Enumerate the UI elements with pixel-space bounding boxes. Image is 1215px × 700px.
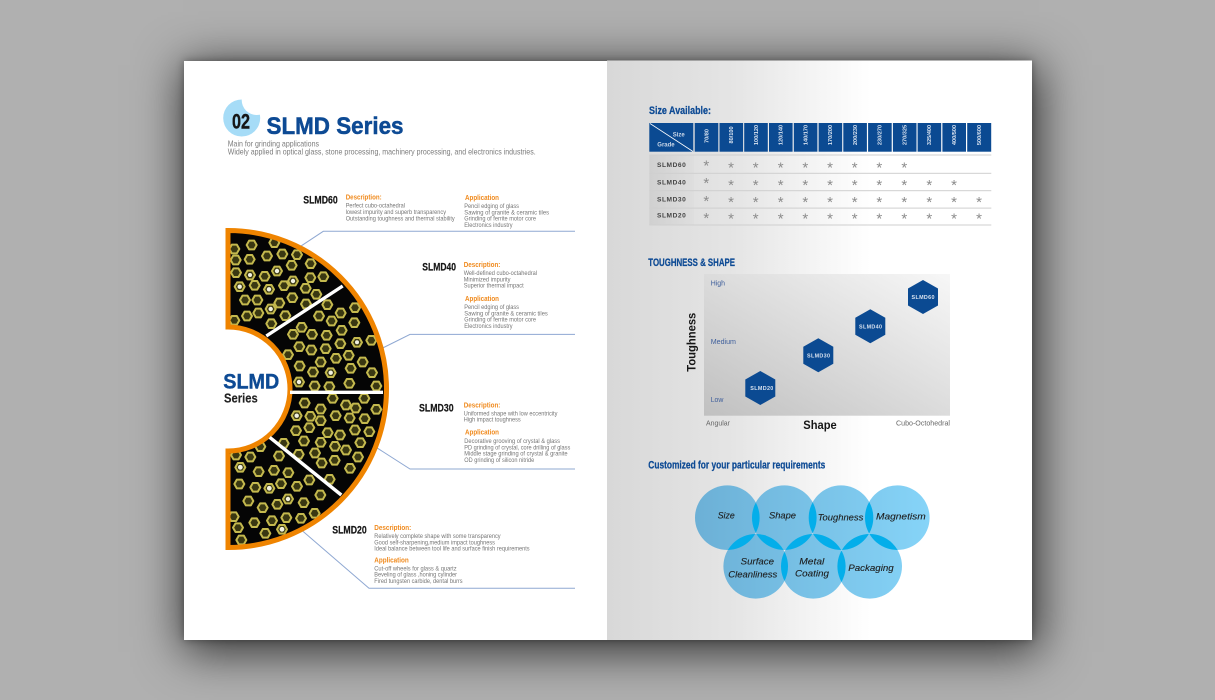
grade block: SLMD20: Description:: [374, 523, 411, 532]
size marks: SLMD20: *: [852, 210, 858, 228]
panel: customization options: [648, 460, 930, 599]
size marks: SLMD30: *: [753, 194, 759, 211]
table corner header: Grade: [657, 143, 675, 149]
grade block: SLMD20: Cut-off wheels for glass & quartz: [374, 565, 457, 572]
heading: size available: Size Available:: [649, 105, 711, 117]
x axis labels: Cubo-Octohedral: [896, 419, 950, 428]
grade block: SLMD40: [422, 260, 548, 330]
hexagon: SLMD20: SLMD20: [750, 386, 773, 392]
table column headers: 120/140: [779, 125, 785, 145]
table row backgrounds: [649, 154, 991, 226]
grade block: SLMD40: Sawing of granite & ceramic tiles: [464, 310, 548, 317]
circle labels: Cleanliness: [728, 569, 778, 580]
intro text: Main for grinding applications: [228, 140, 319, 149]
hexagon: SLMD60: SLMD60: [912, 295, 934, 301]
grade block: SLMD40: SLMD40: [422, 261, 456, 273]
size marks: SLMD20: *: [778, 210, 784, 228]
size marks: SLMD40: *: [802, 177, 808, 194]
diagram: SLMD wheel with four crystal grades: [223, 230, 386, 548]
grade block: SLMD40: Superior thermal impact: [464, 283, 524, 290]
panel: left page series overview: [223, 85, 575, 588]
hexagon: SLMD30: SLMD30: [807, 353, 830, 359]
size marks: SLMD20: *: [876, 210, 882, 228]
size marks: SLMD40: *: [926, 177, 932, 194]
size marks: SLMD60: *: [901, 160, 907, 176]
panel: size availability table: [649, 105, 991, 228]
size marks: SLMD60: *: [703, 158, 709, 174]
size marks: SLMD30: *: [901, 194, 907, 211]
grade block: SLMD20: Application: [374, 556, 409, 565]
panel: toughness and shape chart: [648, 257, 950, 432]
size marks: SLMD60: *: [778, 160, 784, 176]
circle labels: Coating: [795, 569, 830, 580]
size marks: SLMD30: *: [876, 194, 882, 211]
size marks: SLMD40: *: [951, 177, 957, 194]
row labels: [657, 162, 686, 219]
table column headers: 500/600: [977, 125, 983, 145]
grade block: SLMD30: OD grinding of silicon nitride: [464, 457, 535, 464]
x axis labels: Shape: [803, 420, 837, 432]
grade block: SLMD40: Grinding of ferrite motor core: [464, 317, 537, 324]
wedge separators: [266, 286, 383, 495]
size marks: SLMD30: *: [802, 194, 808, 211]
size marks: SLMD30: [703, 193, 982, 211]
size marks: SLMD20: *: [728, 210, 734, 228]
size marks: SLMD60: *: [876, 160, 882, 176]
circle labels: Shape: [769, 510, 796, 521]
table column headers: 170/200: [828, 125, 834, 145]
hexagon: SLMD20: [745, 371, 775, 405]
icon: section number badge: 02: [232, 110, 250, 133]
size marks: SLMD30: *: [778, 194, 784, 211]
size marks: SLMD40: *: [876, 177, 882, 194]
panel: right page background: [607, 60, 1032, 640]
size marks: SLMD30: *: [951, 194, 957, 211]
size marks: SLMD30: *: [976, 194, 982, 211]
y axis labels: High: [711, 279, 725, 288]
size marks: SLMD40: *: [753, 177, 759, 194]
circle labels: Size: [718, 510, 735, 521]
grade block: SLMD40: Application: [465, 294, 499, 303]
grade block: SLMD40: Description:: [464, 260, 500, 269]
x axis labels: Angular: [706, 419, 730, 428]
size marks: SLMD60: *: [728, 160, 734, 176]
intro text: Widely applied in optical glass, stone processing, machinery processing, and electronics industries.: [228, 148, 536, 157]
grade block: SLMD30: Description:: [464, 400, 500, 409]
wheel orange outline: [228, 230, 386, 548]
grade block: SLMD30: PD grinding of crystal, core drilling of glass: [464, 444, 570, 451]
grade block: SLMD40: Well-defined cubo-octahedral: [464, 270, 537, 277]
grade block: SLMD30: Middle stage grinding of crystal & granite: [464, 451, 568, 458]
y axis labels: [711, 279, 736, 404]
row labels: SLMD30: [657, 196, 686, 203]
leader lines: [300, 231, 575, 588]
table column headers: 100/120: [754, 125, 760, 145]
circle labels: Toughness: [818, 512, 864, 523]
grade block: SLMD60: Application: [465, 193, 499, 202]
circle labels: Metal: [799, 556, 825, 567]
title: SLMD Series: [266, 113, 404, 140]
row labels: SLMD20: [657, 212, 686, 219]
grade block: SLMD40: Pencil edging of glass: [464, 304, 519, 311]
grade block: SLMD60: Description:: [346, 193, 382, 202]
table column headers: 230/270: [878, 125, 884, 145]
intro text: [228, 140, 536, 157]
grade block: SLMD30: [419, 400, 570, 464]
grade block: SLMD40: Electronics industry: [464, 323, 513, 330]
size marks: SLMD30: *: [852, 194, 858, 211]
table column headers: 70/80: [704, 129, 710, 143]
grade block: SLMD30: SLMD30: [419, 402, 454, 414]
table corner header: Size: [673, 133, 685, 139]
table column headers: 270/325: [902, 125, 908, 145]
size marks: SLMD40: *: [827, 177, 833, 194]
size marks: SLMD20: *: [827, 210, 833, 228]
hexagon: SLMD40: [855, 309, 885, 343]
grade block: SLMD20: SLMD20: [332, 525, 367, 537]
heading: customized: Customized for your particular requirements: [648, 460, 825, 472]
grade block: SLMD30: Application: [465, 428, 499, 437]
overlapping circles: [695, 485, 930, 599]
hexagon: SLMD40: SLMD40: [859, 324, 882, 330]
size marks: SLMD40: *: [901, 177, 907, 194]
row labels: SLMD60: [657, 162, 686, 169]
grade block: SLMD60: SLMD60: [303, 194, 338, 206]
size marks: SLMD20: *: [901, 210, 907, 228]
table column headers: 80/100: [729, 126, 735, 144]
size marks: SLMD20: [703, 210, 982, 228]
grade block: SLMD20: Fired tungsten carbide, dental burrs: [374, 578, 463, 585]
circle labels: Surface: [741, 556, 774, 567]
size marks: SLMD20: *: [802, 210, 808, 228]
hexagon: SLMD30: [803, 338, 833, 372]
hexagon: SLMD60: [908, 280, 938, 314]
grade block: SLMD30: High impact toughness: [464, 417, 521, 424]
table column headers: 325/400: [927, 125, 933, 145]
grade block: SLMD30: Uniformed shape with low eccentricity: [464, 410, 558, 417]
y axis title: Toughness: [687, 313, 699, 372]
y axis labels: Medium: [711, 337, 736, 346]
size marks: SLMD60: *: [852, 160, 858, 176]
table column headers: 200/230: [853, 125, 859, 145]
grade block: SLMD60: Sawing of granite & ceramic tiles: [464, 209, 549, 216]
grade block: SLMD30: Decorative grooving of crystal & glass: [464, 438, 560, 445]
size marks: SLMD20: *: [753, 210, 759, 228]
size marks: SLMD20: *: [703, 210, 709, 227]
size marks: SLMD30: *: [703, 193, 709, 210]
size marks: SLMD20: *: [951, 210, 957, 228]
table column headers: [695, 123, 991, 152]
grade block: SLMD60: Perfect cubo-octahedral: [346, 203, 405, 210]
circle labels: Magnetism: [876, 511, 926, 522]
grade block: SLMD20: Beveling of glass ,honing cylinder: [374, 572, 457, 579]
size marks: SLMD40: *: [728, 177, 734, 194]
table corner header: [649, 123, 693, 152]
row labels: SLMD40: [657, 179, 686, 186]
table column headers: 400/500: [952, 125, 958, 145]
size marks: SLMD40: *: [778, 177, 784, 194]
crystal texture: [229, 238, 381, 544]
x axis labels: [706, 419, 950, 432]
icon: section number badge: [223, 85, 272, 136]
y axis labels: Low: [711, 395, 724, 404]
size marks: SLMD60: [703, 158, 907, 176]
size marks: SLMD30: *: [926, 194, 932, 211]
size marks: SLMD60: *: [827, 160, 833, 176]
size marks: SLMD20: *: [926, 210, 932, 228]
circle labels: [718, 510, 926, 580]
size marks: SLMD40: *: [852, 177, 858, 194]
brochure sheet: [184, 60, 1032, 640]
size marks: SLMD40: *: [703, 175, 709, 192]
chart background: [704, 274, 950, 416]
grade block: SLMD20: Relatively complete shape with some transparency: [374, 533, 501, 540]
size marks: SLMD30: *: [728, 194, 734, 211]
grade block: SLMD40: Minimized impurity: [464, 276, 511, 283]
grade block: SLMD20: Ideal balance between tool life and surface finish requirements: [374, 546, 530, 553]
brochure spread artwork: [223, 60, 1032, 640]
grade block: SLMD60: lowest impurity and superb transparency: [346, 209, 447, 216]
heading: toughness and shape: TOUGHNESS & SHAPE: [648, 257, 735, 269]
wheel centre label: [223, 370, 279, 405]
grade block: SLMD60: Outstanding toughness and thermal stability: [346, 215, 456, 222]
grade block: SLMD60: Grinding of ferrite motor core: [464, 216, 537, 223]
size marks: SLMD20: *: [976, 210, 982, 228]
wheel centre label: SLMD: [223, 370, 279, 393]
size marks: SLMD60: *: [753, 160, 759, 176]
grade block: SLMD60: Pencil edging of glass: [464, 203, 519, 210]
wheel centre label: Series: [224, 391, 258, 405]
grade block: SLMD60: [303, 193, 549, 229]
grade block: SLMD60: Electronics industry: [464, 222, 513, 229]
circle labels: Packaging: [848, 563, 894, 574]
grade block: SLMD20: Good self-sharpening,medium impact toughness: [374, 539, 495, 546]
size marks: SLMD40: [703, 175, 957, 194]
size marks: SLMD30: *: [827, 194, 833, 211]
size marks: SLMD60: *: [802, 160, 808, 176]
table column headers: 140/170: [803, 125, 809, 145]
grade block: SLMD20: [332, 523, 530, 585]
